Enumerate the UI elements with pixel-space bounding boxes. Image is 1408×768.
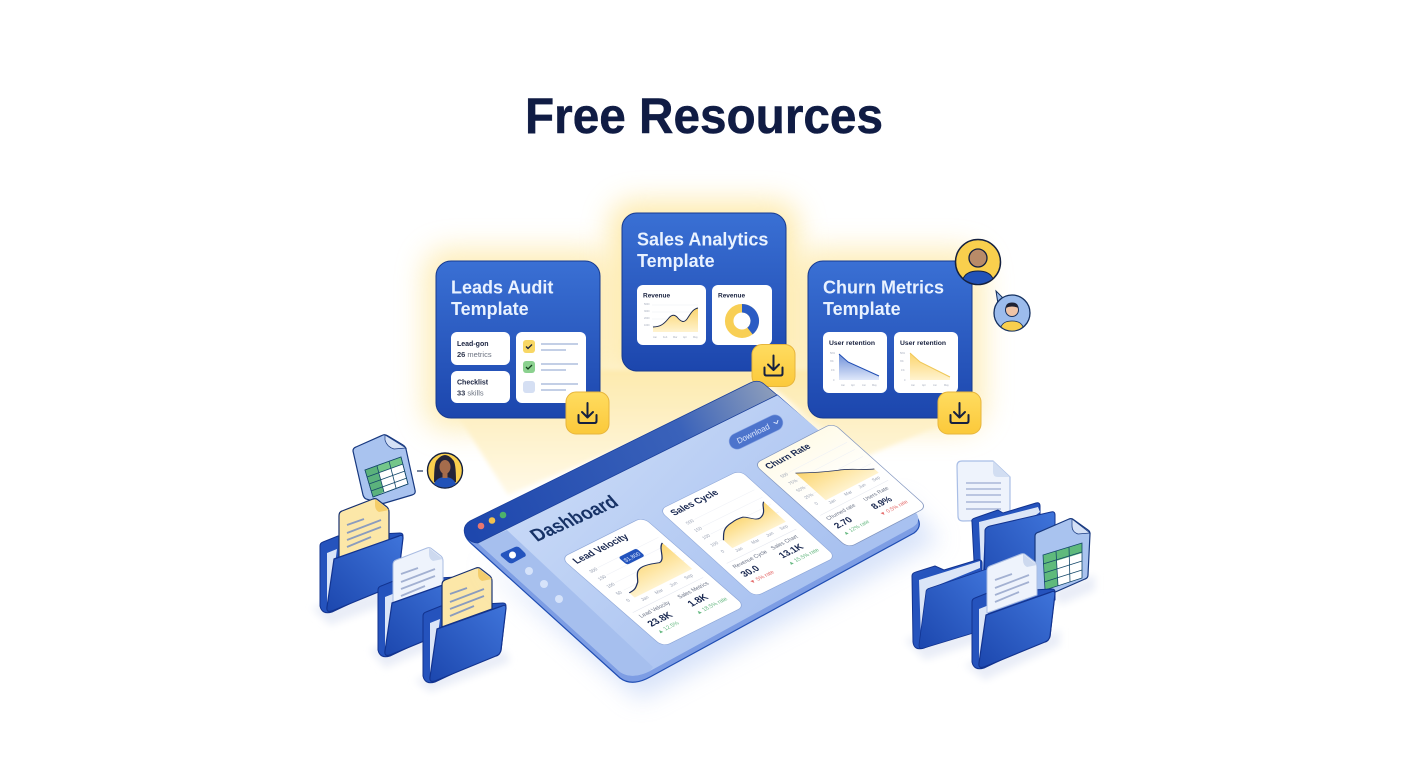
window control dots (478, 512, 506, 529)
user retention yellow chart (894, 332, 958, 393)
lead velocity card: 150 (597, 574, 608, 582)
checklist stat tile: Checklist (457, 380, 489, 386)
checklist tile (516, 332, 586, 403)
icon: download leads (566, 392, 609, 434)
icon: large user avatar (956, 240, 1000, 284)
panel: churn metrics template (808, 261, 972, 418)
icon: download churn (938, 392, 981, 434)
sales cycle card: Revenue Cycle (732, 550, 769, 570)
churn rate card: ▲ 12% rate (842, 520, 871, 537)
revenue line chart: 1000 (644, 324, 650, 327)
lead velocity card: ▲ 18.5% rate (695, 597, 730, 616)
user retention blue chart (823, 332, 887, 393)
dashboard heading: Dashboard (526, 492, 623, 546)
lead-gon stat tile: Lead-gon (457, 341, 488, 348)
light beams (424, 201, 984, 495)
lead velocity card: Lead Velocity (638, 601, 672, 619)
sales cycle card: 500 (685, 518, 696, 526)
checklist stat tile: 33 skills (457, 388, 484, 398)
icon: text document (957, 461, 1010, 521)
churn rate card: Churn Rate (763, 442, 813, 471)
sales cycle card: Sales Cycle (668, 488, 722, 518)
panel: leads audit template (436, 261, 600, 418)
revenue line chart: Jan (653, 336, 658, 339)
folder with yellow paper (320, 499, 403, 613)
panel: sales analytics template (622, 213, 786, 371)
folder with yellow paper front (423, 568, 506, 683)
folder group: right (905, 461, 1095, 680)
sales cycle card: Mar (750, 538, 762, 546)
user retention blue chart: 50% (830, 352, 836, 355)
lead velocity card: $1,800 (623, 551, 643, 563)
title: Free Resources (525, 88, 883, 144)
user retention blue chart: 0 (833, 379, 835, 382)
lead-gon stat tile: 26 metrics (457, 350, 492, 359)
churn rate card: 2.70 (832, 515, 855, 530)
sales cycle card: Jan (734, 546, 745, 554)
sales cycle card: Jun (764, 531, 776, 538)
connector dash (417, 470, 423, 472)
revenue donut chart: Revenue (718, 292, 745, 300)
revenue line chart: Mar (673, 336, 677, 339)
lead velocity card (561, 517, 745, 647)
rear folder (972, 503, 1055, 610)
floor shadows (905, 575, 1095, 680)
lead velocity card: Sep (683, 573, 695, 581)
user retention yellow chart: Jun (933, 384, 938, 387)
churn card heading: Template (823, 299, 901, 319)
churn rate card: Jan (827, 498, 838, 505)
sales cycle card: ▼ 5% rate (749, 570, 776, 585)
churn rate card: 75% (787, 478, 799, 486)
user retention blue chart: Jun (862, 384, 867, 387)
user retention blue chart: 1% (831, 369, 835, 372)
revenue line chart: May (693, 336, 698, 339)
window shadow (480, 500, 940, 700)
revenue line chart: Apr (683, 336, 687, 339)
churn rate card: 500 (779, 472, 790, 479)
sidebar icons (501, 547, 563, 603)
user retention yellow chart: 1% (901, 369, 905, 372)
sales cycle card (659, 470, 836, 597)
revenue line chart: 3000 (644, 310, 650, 313)
sales cycle card: 13.1K (776, 542, 807, 561)
window base (465, 395, 919, 682)
churn rate card: Jun (857, 482, 868, 489)
download pill (726, 412, 786, 452)
icon: spreadsheet document (353, 435, 415, 504)
user retention yellow chart: 50% (900, 352, 906, 355)
lead velocity card: Jun (668, 581, 680, 588)
dashboard window (464, 381, 940, 700)
icon: small user avatar with speech tail (994, 291, 1030, 331)
icon: woman avatar (428, 453, 462, 488)
user retention yellow chart: Apr (922, 384, 926, 387)
checklist stat tile (451, 371, 510, 403)
window sidebar (478, 530, 653, 676)
lead velocity card: 100 (605, 582, 617, 590)
user retention yellow chart: 0 (904, 379, 906, 382)
revenue line chart: Revenue (643, 292, 670, 300)
lead velocity card: ▲ 12.5% (656, 621, 682, 635)
lead-gon stat tile (451, 332, 510, 365)
lead velocity card: Mar (653, 588, 666, 596)
left folder (912, 560, 990, 649)
user retention blue chart: User retention (829, 340, 875, 347)
churn rate card: 50% (795, 485, 807, 493)
lead velocity card: 50 (615, 590, 624, 597)
user retention blue chart: May (872, 384, 877, 387)
user retention blue chart: Apr (851, 384, 855, 387)
leads card heading: Template (451, 299, 529, 319)
churn card heading: Churn Metrics (823, 278, 944, 298)
user retention yellow chart: May (944, 384, 949, 387)
sales card heading: Template (637, 251, 715, 271)
lead velocity card: 1.8K (685, 593, 711, 609)
sales cycle card: 150 (693, 526, 704, 533)
folder group: left (312, 435, 510, 692)
churn rate card: Users Rate (862, 486, 891, 503)
lead velocity card: Lead Velocity (571, 532, 632, 566)
churn rate card (754, 423, 927, 548)
floor shadows (312, 585, 510, 692)
churn rate card: ▼ 0.5% rate (879, 500, 910, 517)
churn rate card: 0 (813, 501, 820, 506)
sales cycle card: 30.0 (738, 564, 763, 579)
lead velocity card: 300 (588, 567, 600, 574)
sales cycle card: Sep (778, 524, 790, 532)
icon: download sales (752, 344, 795, 386)
folder with white paper (378, 548, 461, 657)
sales cycle card: ▲ 15.5% rate (787, 548, 821, 567)
lead velocity card: 23.8K (645, 610, 676, 629)
user retention yellow chart: Jan (911, 384, 916, 387)
window body (478, 395, 918, 676)
leads card heading: Leads Audit (451, 278, 553, 298)
churn rate card: Mar (843, 489, 854, 497)
user retention blue chart: Jan (841, 384, 846, 387)
sales cycle card: 100 (701, 533, 713, 541)
user retention yellow chart: User retention (900, 340, 946, 347)
revenue line chart: 5000 (644, 303, 650, 306)
lead velocity card: Jan (640, 595, 651, 603)
sales cycle card: Sales Chart (770, 534, 800, 551)
churn rate card: Sep (870, 475, 882, 482)
revenue donut chart (712, 285, 772, 345)
title bar (464, 381, 777, 543)
revenue line chart: Feb (663, 336, 668, 339)
front folder with white paper (972, 554, 1055, 669)
lead velocity card: 0 (625, 598, 632, 603)
revenue line chart: 2000 (644, 317, 650, 320)
user retention blue chart: 3% (830, 360, 834, 363)
download pill: Download (735, 422, 771, 446)
sales cycle card: 0 (720, 549, 727, 554)
churn rate card: 8.9% (869, 494, 895, 511)
sales card heading: Sales Analytics (637, 230, 768, 250)
churn rate card: 25% (803, 492, 815, 500)
sales cycle card: 100 (709, 541, 721, 548)
user retention yellow chart: 3% (900, 360, 904, 363)
revenue line chart (637, 285, 706, 345)
icon: spreadsheet document (1035, 519, 1090, 593)
lead velocity card: Sales Metrics (677, 581, 711, 600)
churn rate card: Churned rate (825, 503, 858, 522)
